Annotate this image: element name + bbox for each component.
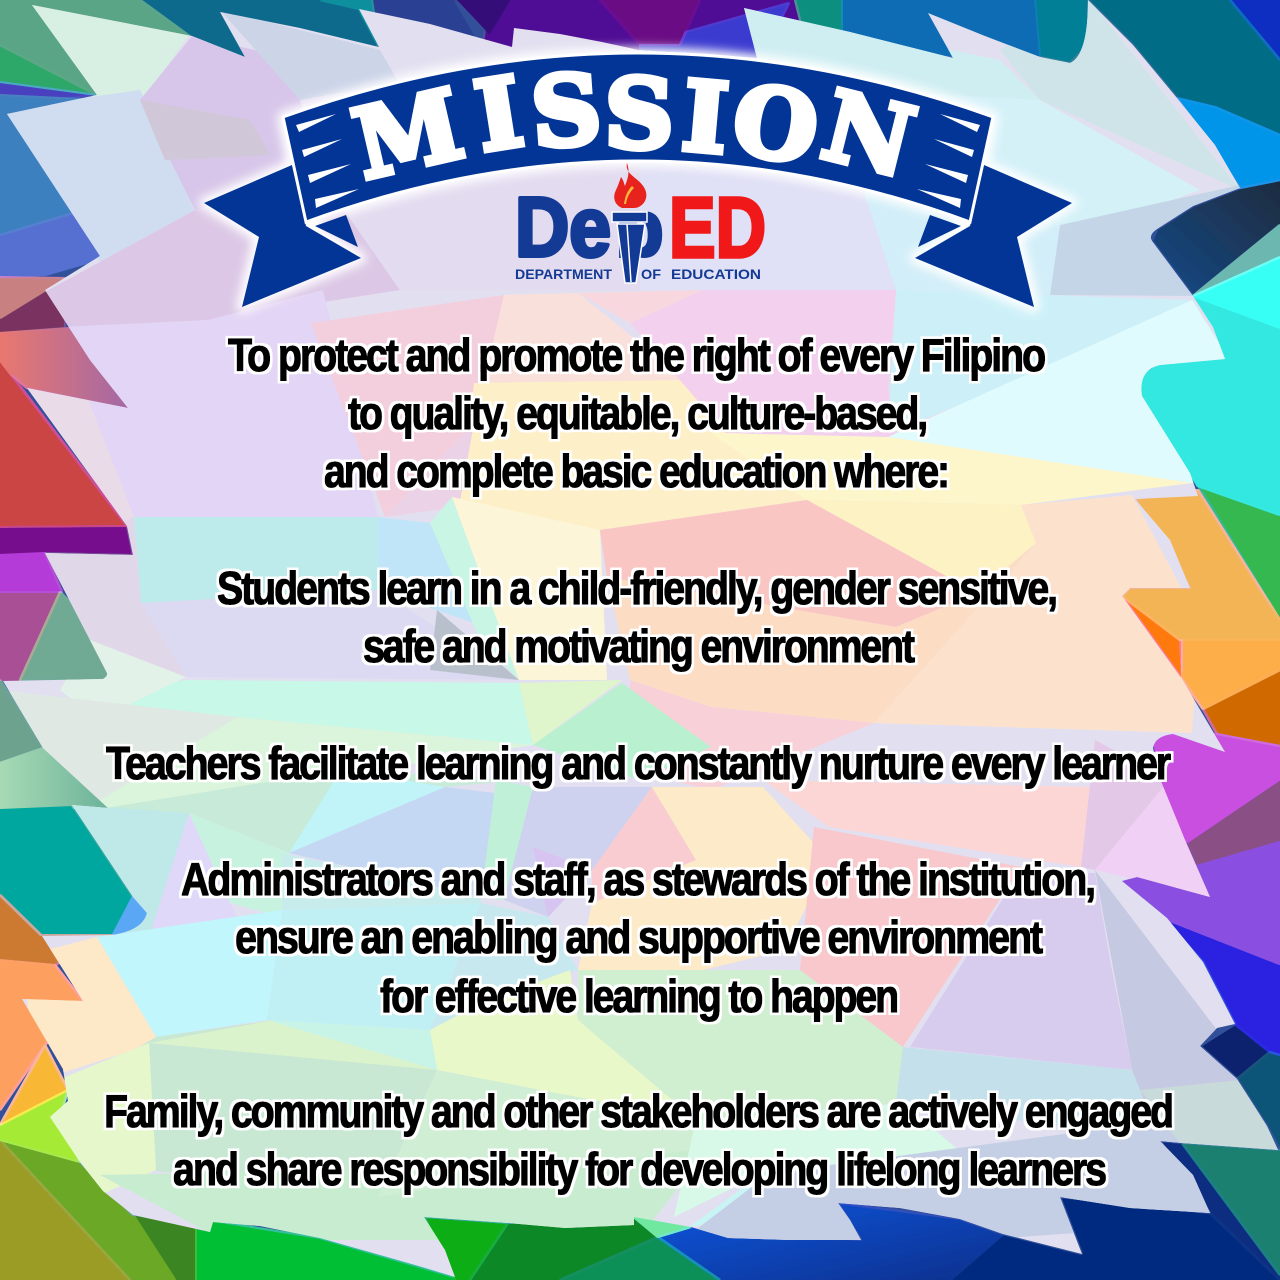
administrators statement: Administrators and staff, as stewards of the institution, bbox=[181, 853, 1094, 905]
panel lower facets bbox=[20, 740, 1280, 1250]
mission statement intro: and complete basic education where: bbox=[324, 445, 948, 497]
right side facets bbox=[1088, 0, 1280, 1280]
panel middle facets bbox=[0, 290, 1230, 815]
banner glow bbox=[204, 53, 1072, 307]
mission statement intro bbox=[228, 329, 1045, 497]
banner title: MISSION: MISSION bbox=[344, 52, 925, 201]
students statement: Students learn in a child-friendly, gender sensitive, bbox=[217, 562, 1056, 614]
wordmark: Dep: De bbox=[515, 180, 611, 274]
bottom facets bbox=[424, 1197, 1280, 1280]
ribbon arch bbox=[283, 53, 993, 222]
torch flame bbox=[614, 163, 646, 208]
left ribbon fold bbox=[315, 215, 358, 247]
logo caption left: DEPARTMENT bbox=[515, 267, 613, 282]
family and community statement bbox=[104, 1085, 1172, 1195]
administrators statement: for effective learning to happen bbox=[380, 970, 897, 1022]
torch handle bbox=[612, 212, 647, 283]
students statement: safe and motivating environment bbox=[363, 620, 915, 672]
mission statement intro: to quality, equitable, culture-based, bbox=[348, 387, 926, 439]
lower left facets bbox=[0, 680, 455, 1280]
right stripe accents bbox=[917, 114, 980, 208]
mission statement intro: To protect and promote the right of every Filipino bbox=[228, 329, 1045, 381]
right ribbon tail bbox=[915, 165, 1072, 307]
DepED logo bbox=[515, 163, 766, 283]
wordmark: ED: ED bbox=[669, 181, 766, 276]
top facets bbox=[140, 0, 1088, 63]
left ribbon tail bbox=[204, 165, 361, 307]
panel top facets bbox=[0, 0, 1240, 330]
family and community statement: and share responsibility for developing lifelong learners bbox=[173, 1143, 1106, 1195]
mission ribbon banner bbox=[204, 52, 1072, 307]
students statement bbox=[217, 562, 1056, 672]
left stripe accents bbox=[296, 114, 359, 208]
administrators statement: ensure an enabling and supportive environment bbox=[235, 911, 1043, 963]
right ribbon fold bbox=[918, 215, 961, 247]
top left facets bbox=[0, 0, 195, 680]
wordmark: p bowl: p bbox=[615, 184, 664, 273]
administrators statement bbox=[181, 853, 1094, 1022]
logo caption OF: OF bbox=[641, 267, 661, 282]
logo caption right: EDUCATION bbox=[671, 267, 761, 282]
